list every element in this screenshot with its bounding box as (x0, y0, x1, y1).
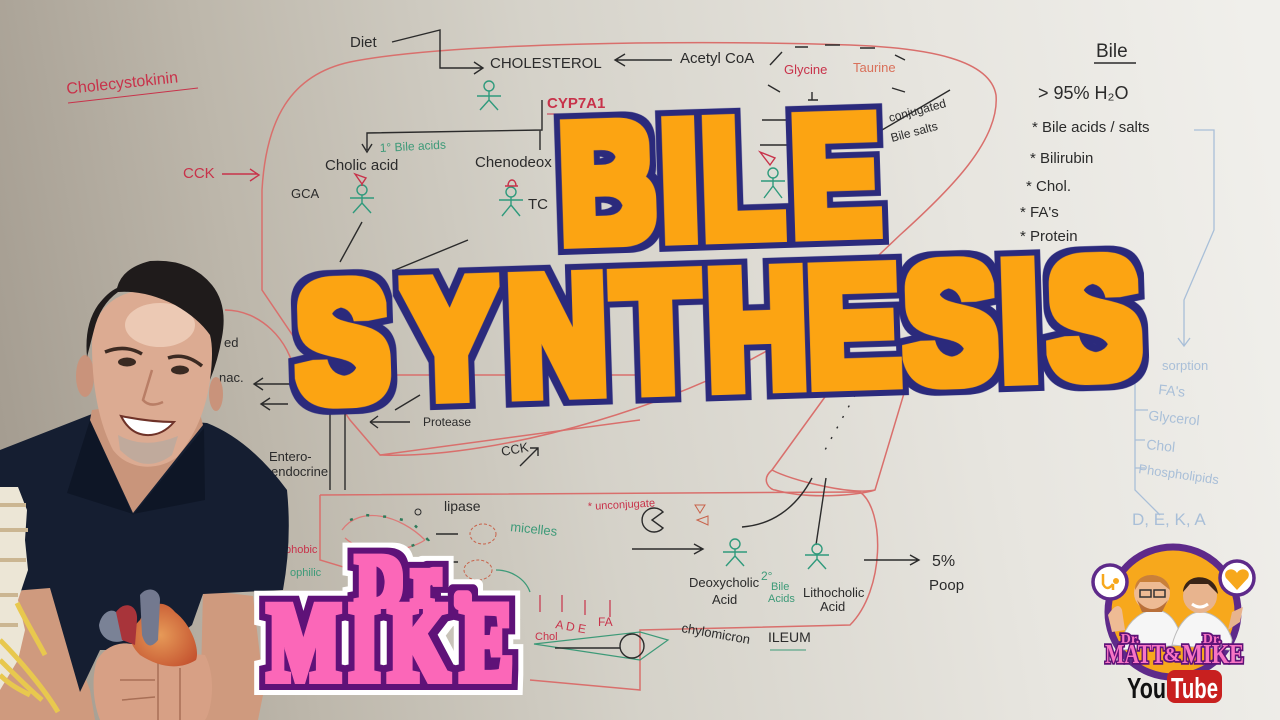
eyes and brows (105, 348, 202, 366)
face (92, 290, 212, 467)
title: SYNTHESIS: SYNTHESIS (294, 223, 1143, 437)
title: BILE: BILE (557, 80, 882, 278)
stick figure: cholesterol (477, 81, 501, 110)
label: glycine and taurine: Glycine (784, 62, 827, 77)
left diagram labels: Protease (423, 415, 471, 429)
micelle digestion diagram (285, 498, 558, 592)
label: glycine and taurine (768, 45, 950, 145)
unconjugated and secondary bile acids (588, 395, 964, 614)
blue absorption list (1132, 130, 1220, 529)
left diagram labels (219, 335, 538, 490)
shirt (0, 414, 289, 692)
stubble chin (118, 435, 178, 464)
badge name (1105, 632, 1244, 669)
badge name: Dr. (1121, 632, 1139, 647)
label: bile list: Bile (1096, 41, 1128, 62)
label: diet to cholesterol (350, 30, 754, 74)
cartoon doctor: Matt (1108, 575, 1182, 650)
liver outline (262, 43, 996, 455)
hands (94, 643, 212, 720)
label: CCK arrow (183, 165, 259, 182)
left diagram labels: nac. (219, 370, 244, 385)
ileum enterocyte diagram (534, 595, 811, 660)
label: glycine and taurine: Bile salts (889, 119, 939, 145)
badge name: Dr. (1203, 632, 1221, 647)
blue absorption list: sorption (1162, 358, 1208, 373)
side bubble: heart (1220, 561, 1254, 595)
ears (76, 355, 94, 397)
label: bile list: * Bile acids / salts (1032, 119, 1150, 136)
blue absorption list: Glycerol (1148, 407, 1200, 428)
logo: Dr. Mike: MIKE (268, 579, 512, 705)
label: Cholecystokinin: Cholecystokinin (66, 69, 179, 98)
label: diet to cholesterol: Acetyl CoA (680, 50, 754, 67)
blue absorption list: Chol (1146, 436, 1176, 455)
small intestine outline (320, 492, 878, 690)
label: CCK arrow: CCK (183, 165, 215, 182)
nose (143, 370, 163, 405)
gallbladder and duct outline (225, 310, 908, 496)
label: bile list (1020, 41, 1150, 245)
stick figure: cholic (350, 174, 374, 213)
badge name: MIKE (1182, 639, 1244, 669)
label: bile list: * FA's (1020, 204, 1059, 221)
left diagram labels: endocrine (271, 464, 328, 479)
label: primary bile acids: 1° Bile acids (379, 138, 446, 155)
logo: Dr. Matt and Mike YouTube: Tube (1171, 673, 1218, 705)
smile (121, 416, 174, 435)
stick figure: conjugated (760, 152, 785, 198)
badge name: MATT (1105, 639, 1165, 669)
label: bile list: * Protein (1020, 228, 1078, 245)
label: glycine and taurine: conjugated (887, 96, 947, 125)
ileum enterocyte diagram: ILEUM (768, 629, 811, 645)
micelle digestion diagram: phobic (285, 544, 318, 556)
side bubble: stethoscope (1093, 565, 1127, 599)
hair (86, 261, 224, 380)
blue absorption list: D, E, K, A (1132, 510, 1206, 529)
unconjugated and secondary bile acids: Acid (712, 592, 737, 607)
left diagram labels: ed (224, 335, 238, 350)
ileum enterocyte diagram: FA (598, 615, 613, 629)
unconjugated and secondary bile acids: Deoxycholic (689, 575, 760, 590)
unconjugated and secondary bile acids: Lithocholic (803, 585, 865, 600)
unconjugated and secondary bile acids: * unconjugate (588, 497, 655, 513)
ileum enterocyte diagram: chylomicron (680, 620, 751, 647)
label: bile list: > 95% H₂O (1038, 83, 1129, 103)
unconjugated and secondary bile acids: 5% (932, 553, 955, 570)
label: GCA: GCA (291, 186, 320, 201)
left diagram labels: Entero- (269, 449, 312, 464)
branch arrows from cholesterol (362, 100, 542, 152)
stick figure: chenodeoxy (499, 180, 523, 216)
collar (67, 420, 205, 515)
YouTube wordmark: You (1127, 673, 1166, 705)
logo: Dr. Matt and Mike YouTube (1093, 547, 1254, 705)
neck (90, 395, 203, 513)
thumb (1108, 606, 1125, 632)
unconjugated and secondary bile acids: 2° (761, 569, 773, 583)
heart model (99, 590, 197, 666)
ileum enterocyte diagram: A D E (554, 617, 587, 636)
unconjugated and secondary bile acids: Bile (771, 581, 789, 593)
micelle digestion diagram: ophilic (290, 567, 322, 579)
forearms (0, 586, 264, 720)
person: Dr Mike (0, 261, 289, 720)
badge circle (1108, 547, 1238, 677)
logo: Dr. Mike: Dr. (356, 541, 471, 621)
unconjugated and secondary bile acids: Acids (768, 593, 795, 605)
micelle digestion diagram: micelles (510, 519, 558, 539)
label: CYP7A1: CYP7A1 (547, 95, 605, 112)
badge name: & (1164, 644, 1180, 666)
unconjugated and secondary bile acids: Poop (929, 577, 964, 594)
cartoon doctor: Mike (1172, 577, 1243, 650)
spine model (0, 487, 58, 712)
thumb (1228, 607, 1243, 630)
label: cholic acid: Cholic acid (325, 157, 398, 174)
micelle digestion diagram: lipase (444, 498, 481, 514)
unconjugated and secondary bile acids: Acid (820, 599, 845, 614)
ileum enterocyte diagram: Chol (535, 631, 558, 643)
label: bile list: * Bilirubin (1030, 150, 1093, 167)
blue absorption list: FA's (1158, 381, 1186, 400)
label: diet to cholesterol: CHOLESTEROL (490, 55, 602, 72)
label: glycine and taurine: Taurine (853, 60, 896, 75)
label: TCA: TC (528, 196, 548, 213)
left diagram labels: CCK (500, 439, 530, 459)
label: chenodeoxycholic: Chenodeox (475, 154, 552, 171)
blue absorption list: Phospholipids (1138, 461, 1220, 487)
label: bile list: * Chol. (1026, 178, 1071, 195)
label: diet to cholesterol: Diet (350, 34, 378, 51)
forehead highlight (125, 303, 195, 347)
